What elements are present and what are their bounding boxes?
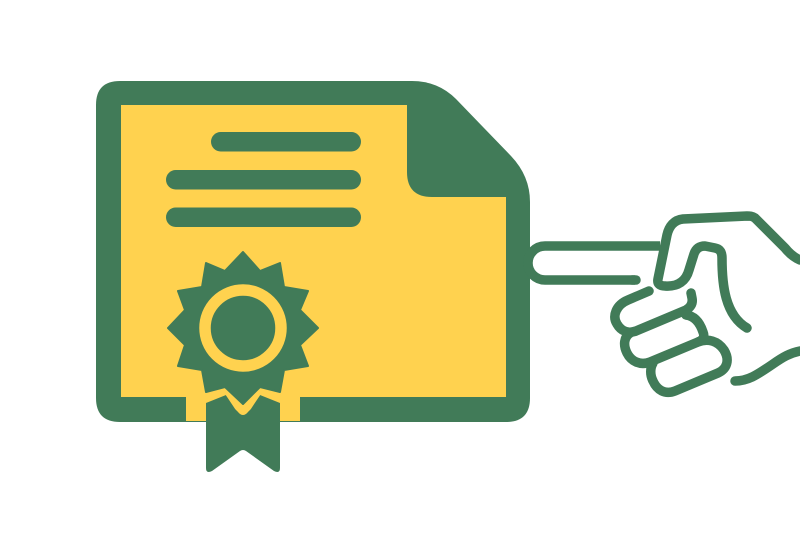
text line 2 <box>166 170 361 190</box>
text line 3 <box>166 208 361 227</box>
icon: award seal with ribbon <box>168 252 318 472</box>
index finger <box>528 246 660 280</box>
icon: certificate document <box>96 81 530 472</box>
back of hand and thumb <box>658 216 800 328</box>
text line 1 <box>211 132 361 152</box>
seal star <box>168 252 318 404</box>
second finger <box>625 315 704 363</box>
ribbon yellow edge <box>206 389 280 410</box>
seal ring <box>205 290 281 366</box>
icon: pointing hand <box>528 216 800 392</box>
document outer frame <box>96 81 530 422</box>
third finger <box>651 340 727 392</box>
wrist <box>735 351 800 381</box>
document yellow sheet <box>121 105 506 421</box>
first finger <box>615 291 692 332</box>
ribbon <box>206 395 280 472</box>
